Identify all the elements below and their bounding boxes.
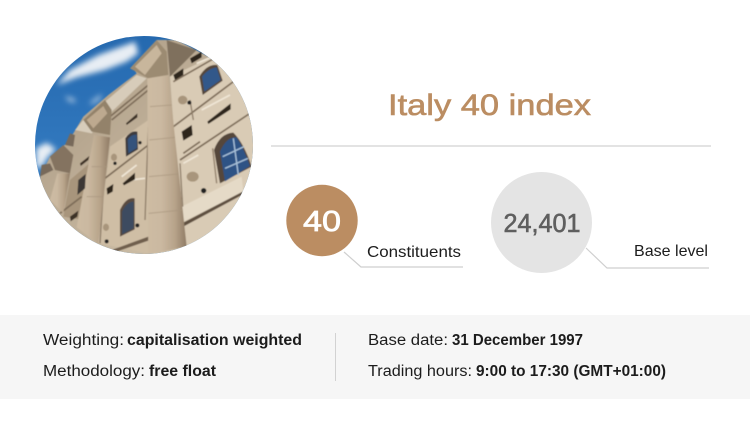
trading hours: 9:00 to 17:30 (GMT+01:00) bbox=[476, 363, 666, 380]
stat: constituents bbox=[286, 185, 463, 267]
methodology: free float bbox=[149, 363, 216, 380]
title: Italy 40 index bbox=[388, 89, 591, 122]
sub: string courses bbox=[60, 48, 250, 213]
stat: constituents: Constituents bbox=[367, 244, 461, 261]
photo: building facade bbox=[35, 36, 253, 254]
stat: base level: Base level bbox=[634, 243, 708, 260]
base date bbox=[368, 332, 583, 349]
weighting: Weighting: bbox=[43, 332, 124, 349]
trading hours: Trading hours: bbox=[368, 363, 472, 380]
sub: facade wall bbox=[40, 39, 209, 254]
methodology: Methodology: bbox=[43, 363, 145, 380]
base date: Base date: bbox=[368, 332, 448, 349]
stat: base level bbox=[491, 172, 709, 273]
weighting: capitalisation weighted bbox=[127, 332, 302, 349]
methodology bbox=[43, 363, 216, 380]
sub: windows bbox=[214, 133, 252, 183]
header divider bbox=[271, 145, 711, 147]
sub: columns bbox=[147, 75, 187, 254]
trading hours bbox=[368, 363, 666, 380]
info band bbox=[0, 315, 750, 399]
weighting bbox=[43, 332, 302, 349]
sub: cornices bbox=[130, 40, 168, 78]
base date: 31 December 1997 bbox=[452, 332, 583, 349]
stat: constituents: 40 bbox=[303, 206, 341, 238]
stat: base level: 24,401 bbox=[504, 208, 580, 238]
